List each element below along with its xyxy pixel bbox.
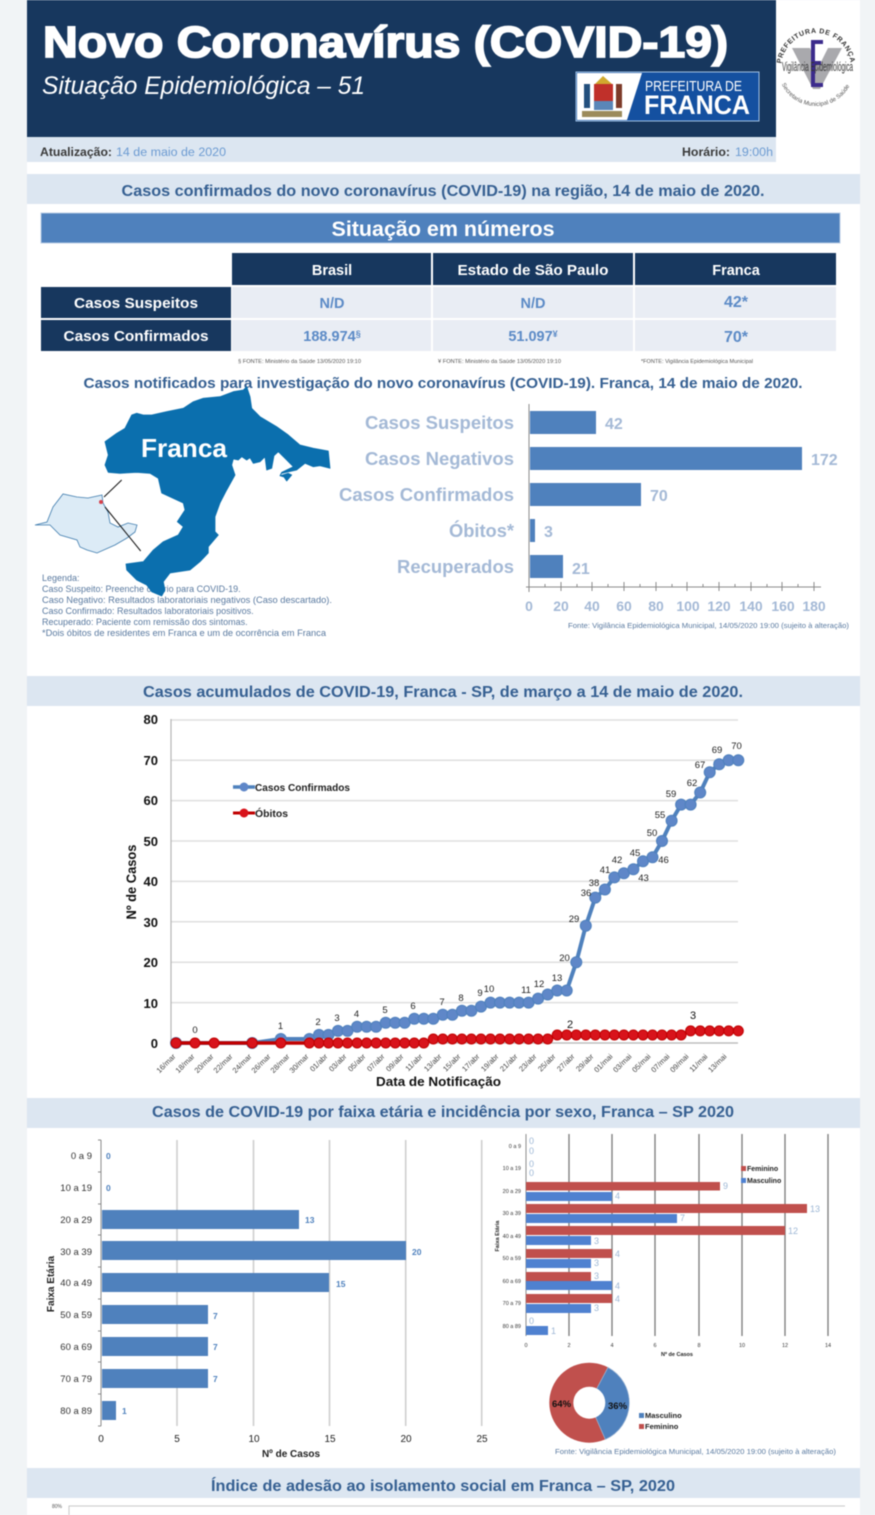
line chart: casos acumulados	[124, 712, 742, 1089]
legend text: Legenda:	[42, 573, 80, 583]
x axis labels: 27/abr	[555, 1052, 577, 1073]
x axis labels: 20	[553, 598, 569, 614]
map: São Paulo state locator	[35, 480, 141, 553]
bar: recuperados	[397, 555, 590, 578]
data labels: 62	[687, 778, 697, 789]
axis labels: 8	[697, 1343, 701, 1349]
table: situação em números: Estado de São Paulo	[458, 263, 609, 279]
axis labels: 0	[524, 1343, 528, 1349]
value labels: 0	[529, 1146, 534, 1156]
data labels: 29	[569, 914, 579, 925]
section heading: casos acumulados: Casos acumulados de COVID-19, Franca - SP, de março a 14 de maio de 2020.	[143, 684, 743, 701]
data labels: 2	[315, 1017, 321, 1028]
y axis labels: 30	[144, 915, 158, 930]
axis labels	[98, 1434, 488, 1445]
x axis labels: 21/abr	[498, 1052, 520, 1073]
bar: negativos: Casos Negativos	[365, 448, 514, 469]
y axis labels: 50	[144, 834, 158, 849]
x axis labels: 23/abr	[517, 1052, 539, 1073]
data labels: 38	[589, 878, 599, 889]
series: óbitos	[176, 1031, 738, 1043]
axis labels: 25	[476, 1434, 488, 1445]
x axis labels: 17/abr	[460, 1052, 482, 1073]
legend text: Recuperado: Paciente com remissão dos sintomas.	[42, 617, 248, 627]
title: Novo Coronavírus (COVID-19)	[43, 18, 728, 67]
value labels: 0	[106, 1151, 111, 1161]
age labels: 20 a 29	[60, 1215, 92, 1226]
age labels: 50 a 59	[60, 1310, 92, 1321]
series: casos confirmados	[176, 760, 738, 1043]
value labels: 12	[788, 1226, 798, 1236]
age labels: 60 a 69	[503, 1279, 521, 1285]
data labels: 59	[666, 789, 676, 800]
logo: Prefeitura de Franca: FRANCA	[644, 90, 750, 120]
axis labels: 0	[98, 1434, 104, 1445]
legend text: Caso Negativo: Resultados laboratoriais negativos (Caso descartado).	[42, 595, 332, 605]
data labels: 11	[521, 985, 531, 996]
value labels: 7	[213, 1342, 218, 1352]
x axis labels: 26/mar	[250, 1052, 273, 1075]
x axis labels: 09/mai	[668, 1052, 691, 1074]
chart: isolamento social (cropped)	[52, 1504, 845, 1515]
table: situação em números	[41, 253, 836, 351]
logo: Prefeitura de Franca	[576, 72, 759, 121]
data labels: 3	[334, 1013, 340, 1024]
data labels: 4	[354, 1009, 359, 1020]
donut chart: sexo: 64%	[552, 1399, 572, 1410]
data labels: 70	[731, 741, 742, 752]
section heading: casos confirmados: Casos confirmados do novo coronavírus (COVID-19) na região, 14 de maio de 2020.	[122, 183, 764, 200]
value labels: 3	[594, 1236, 599, 1246]
age labels: 80 a 89	[503, 1324, 521, 1330]
table footnotes: *FONTE: Vigilância Epidemiológica Municipal	[641, 359, 753, 365]
bar chart: casos notificados	[339, 404, 838, 614]
table: situação em números: 51.097	[508, 329, 553, 345]
bar chart: incidência por sexo: Faixa Etária	[495, 1220, 501, 1251]
bar chart: incidência por sexo	[495, 1134, 831, 1358]
x axis labels: 22/mar	[212, 1052, 235, 1075]
value labels: 0	[529, 1159, 534, 1169]
legend: Feminino	[747, 1166, 778, 1173]
update bar	[27, 137, 776, 162]
age labels: 0 a 9	[71, 1151, 92, 1162]
update bar: 14 de maio de 2020	[116, 147, 226, 159]
legend: Casos Confirmados	[255, 782, 350, 794]
y axis labels: 10	[144, 996, 158, 1011]
legend: Masculino	[747, 1178, 781, 1185]
x axis labels: 13/abr	[422, 1052, 444, 1073]
value labels: 13	[810, 1204, 820, 1214]
axis titles: Nº de Casos	[262, 1449, 320, 1460]
source note: Fonte: Vigilância Epidemiológica Municipal, 14/05/2020 19:00 (sujeito à alteração)	[555, 1447, 837, 1456]
value labels: 1	[122, 1406, 127, 1416]
data labels: 2	[567, 1019, 573, 1031]
data labels: 45	[630, 848, 640, 859]
data labels: 0	[192, 1025, 198, 1036]
value labels: 0	[529, 1316, 534, 1326]
x axis labels: 140	[739, 598, 763, 614]
series: feminino	[526, 1182, 807, 1303]
axis labels	[524, 1343, 831, 1349]
value labels: 4	[615, 1294, 620, 1304]
value labels: 9	[723, 1181, 728, 1191]
x axis labels: 19/abr	[479, 1052, 501, 1073]
bar: óbitos	[449, 519, 553, 542]
x axis labels: 09/abr	[384, 1052, 406, 1073]
data labels: 1	[278, 1021, 283, 1032]
source note: Fonte: Vigilância Epidemiológica Municipal, 14/05/2020 19:00 (sujeito à alteração)	[568, 621, 850, 630]
table: situação em números: Brasil	[312, 263, 352, 279]
heading: situação em números: Situação em números	[332, 218, 554, 241]
data labels	[192, 741, 742, 1036]
table: situação em números: ¥	[553, 329, 558, 339]
legend: Óbitos	[255, 807, 288, 820]
age labels: 30 a 39	[60, 1247, 92, 1258]
axis labels: 14	[825, 1343, 831, 1349]
value labels: 7	[213, 1311, 218, 1321]
x axis labels: 03/abr	[327, 1052, 349, 1073]
age labels: 70 a 79	[60, 1374, 92, 1385]
section heading: faixa etária: Casos de COVID-19 por faixa etária e incidência por sexo, Franca – SP 2020	[152, 1104, 734, 1121]
table: situação em números: Casos Suspeitos	[74, 296, 198, 312]
axis labels: 10	[248, 1434, 260, 1445]
section heading: faixa etária	[27, 1098, 860, 1128]
bar: suspeitos	[365, 411, 623, 434]
table: situação em números: Franca	[712, 263, 761, 279]
data labels: 36	[581, 888, 591, 899]
value labels: 15	[336, 1279, 346, 1289]
data labels: 13	[552, 973, 562, 984]
age labels: 10 a 19	[60, 1183, 92, 1194]
bar: óbitos: 3	[544, 524, 553, 541]
data labels: 41	[600, 865, 610, 876]
table: situação em números: §	[356, 329, 361, 339]
y axis title: Nº de Casos	[124, 844, 139, 920]
x axis labels: 05/abr	[346, 1052, 368, 1073]
x axis title: Data de Notificação	[376, 1074, 501, 1089]
x axis labels: 24/mar	[231, 1052, 254, 1075]
update bar: Horário:	[682, 147, 730, 159]
x axis labels: 120	[707, 598, 731, 614]
x axis labels: 01/abr	[308, 1052, 330, 1073]
axis labels: 20	[400, 1434, 412, 1445]
data labels: 7	[439, 997, 445, 1008]
x axis labels: 60	[616, 598, 632, 614]
x axis labels: 15/abr	[441, 1052, 463, 1073]
bar: óbitos: Óbitos*	[449, 520, 515, 541]
donut chart: sexo: 36%	[608, 1401, 628, 1412]
y axis labels: 20	[144, 955, 158, 970]
x axis labels	[155, 1052, 729, 1075]
legend	[233, 782, 350, 820]
legend text	[42, 573, 332, 638]
x axis labels: 100	[676, 598, 700, 614]
value labels: 7	[680, 1213, 685, 1223]
value labels: 0	[529, 1136, 534, 1146]
x axis labels: 03/mai	[611, 1052, 634, 1074]
section heading: isolamento social: Índice de adesão ao isolamento social em Franca – SP, 2020	[211, 1476, 675, 1495]
subtitle: Situação Epidemiológica – 51	[42, 72, 365, 100]
table: situação em números: 188.974	[303, 329, 356, 345]
value labels: 0	[529, 1168, 534, 1178]
value labels: 7	[213, 1374, 218, 1384]
value labels: 3	[594, 1258, 599, 1268]
axis labels: 5	[174, 1434, 180, 1445]
table: situação em números: N/D	[320, 296, 344, 312]
section heading: casos confirmados	[27, 174, 860, 204]
x axis labels: 25/abr	[536, 1052, 558, 1073]
data labels: 9	[477, 988, 483, 999]
legend text: Caso Confirmado: Resultados laboratoriais positivos.	[42, 606, 254, 616]
logo: Vigilância Epidemiológica: PREFEITURA DE FRANÇA	[776, 28, 856, 64]
logo: Vigilância Epidemiológica	[776, 28, 856, 108]
axis labels: 2	[567, 1343, 571, 1349]
data labels: 67	[695, 760, 705, 771]
donut chart: sexo	[549, 1363, 682, 1443]
x axis labels: 16/mar	[155, 1052, 178, 1075]
bar: negativos	[365, 447, 838, 470]
table footnotes: § FONTE: Ministério da Saúde 13/05/2020 19:10	[238, 359, 361, 365]
x axis labels: 11/abr	[403, 1052, 425, 1073]
x axis labels: 07/mai	[649, 1052, 672, 1074]
data labels: 8	[458, 993, 464, 1004]
legend text: *Dois óbitos de residentes em Franca e um de ocorrência em Franca	[42, 628, 326, 638]
age labels: 10 a 19	[503, 1166, 521, 1172]
bar: negativos: 172	[811, 452, 838, 469]
chart: isolamento social (cropped): 80%	[52, 1504, 63, 1510]
legend	[741, 1166, 781, 1185]
x axis labels: 11/mai	[688, 1052, 710, 1074]
age labels: 70 a 79	[503, 1301, 521, 1307]
x axis labels: 40	[584, 598, 600, 614]
age labels: 80 a 89	[60, 1406, 92, 1417]
section heading: casos acumulados	[27, 676, 860, 706]
legend: Feminino	[645, 1422, 679, 1431]
bar: confirmados	[339, 483, 668, 506]
age labels	[60, 1151, 92, 1417]
x axis labels: 0	[525, 598, 533, 614]
series: masculino	[526, 1192, 677, 1335]
value labels: 0	[106, 1183, 111, 1193]
y axis labels: 70	[144, 753, 158, 768]
value labels: 4	[615, 1191, 620, 1201]
legend	[639, 1411, 682, 1431]
data labels: 5	[382, 1005, 388, 1016]
bar: suspeitos: Casos Suspeitos	[365, 412, 514, 433]
x axis labels	[525, 598, 826, 614]
value labels: 20	[412, 1247, 422, 1257]
x axis labels: 30/mar	[288, 1052, 311, 1075]
bar chart: casos por faixa etária	[46, 1140, 488, 1460]
section heading: casos notificados: Casos notificados para investigação do novo coronavírus (COVID-19). Franca, 14 de maio de 2020.	[84, 375, 802, 392]
age labels: 30 a 39	[503, 1211, 521, 1217]
logo: Prefeitura de Franca: PREFEITURA DE	[645, 79, 742, 95]
bar chart: casos por faixa etária: Faixa Etária	[46, 1255, 57, 1312]
value labels: 1	[551, 1326, 556, 1336]
table: situação em números: 42*	[724, 294, 749, 311]
y axis labels: 60	[144, 793, 158, 808]
logo: Vigilância Epidemiológica: Secretaria Municipal de Saúde	[782, 82, 850, 108]
value labels: 4	[615, 1249, 620, 1259]
value labels: 4	[615, 1281, 620, 1291]
table: situação em números: 70*	[724, 329, 749, 346]
bar: confirmados: 70	[650, 488, 668, 505]
heading: situação em números	[41, 213, 840, 243]
value labels	[529, 1136, 820, 1336]
y axis labels: 0	[151, 1036, 158, 1051]
data labels: 3	[690, 1010, 696, 1022]
data labels: 50	[647, 828, 657, 839]
header banner	[27, 0, 776, 137]
age labels: 0 a 9	[509, 1144, 521, 1150]
bar: suspeitos: 42	[605, 416, 623, 433]
legend: Masculino	[645, 1411, 682, 1420]
x axis labels: 29/abr	[574, 1052, 596, 1073]
axis labels: 4	[610, 1343, 614, 1349]
value labels: 3	[594, 1303, 599, 1313]
data labels: 20	[559, 953, 570, 964]
data labels: 55	[655, 810, 665, 821]
label: Franca: Franca	[141, 433, 228, 463]
x axis labels: 05/mai	[630, 1052, 653, 1074]
x axis labels: 18/mar	[174, 1052, 197, 1075]
data labels: 10	[484, 984, 494, 995]
bar: recuperados: Recuperados	[397, 556, 514, 577]
value labels: 3	[594, 1271, 599, 1281]
axis labels: 12	[782, 1343, 788, 1349]
table footnotes	[238, 359, 753, 365]
data labels: 6	[410, 1001, 416, 1012]
legend text: Caso Suspeito: Preenche critério para COVID-19.	[42, 584, 241, 594]
axis labels: 6	[653, 1343, 657, 1349]
data labels: 42	[612, 855, 622, 866]
age labels: 40 a 49	[60, 1278, 92, 1289]
value labels: 13	[305, 1215, 315, 1225]
update bar: 19:00h	[735, 147, 773, 159]
age labels: 60 a 69	[60, 1342, 92, 1353]
update bar: Atualização:	[40, 147, 112, 159]
age labels: 50 a 59	[503, 1256, 521, 1262]
bar: recuperados: 21	[572, 561, 590, 578]
value labels	[106, 1151, 422, 1416]
age labels	[503, 1144, 521, 1330]
age labels: 20 a 29	[503, 1189, 521, 1195]
age labels: 40 a 49	[503, 1234, 521, 1240]
map: Franca municipality	[105, 387, 330, 596]
axis labels: 15	[324, 1434, 336, 1445]
y axis labels: 80	[144, 712, 158, 727]
axis labels: 10	[739, 1343, 745, 1349]
data labels: 46	[658, 855, 669, 866]
y axis labels: 40	[144, 874, 158, 889]
x axis labels: 20/mar	[193, 1052, 216, 1075]
table: situação em números: Casos Confirmados	[64, 329, 208, 345]
bar: confirmados: Casos Confirmados	[339, 484, 514, 505]
y axis labels	[144, 712, 158, 1051]
x axis labels: 07/abr	[365, 1052, 387, 1073]
table: situação em números: N/D	[521, 296, 545, 312]
x axis labels: 180	[802, 598, 826, 614]
x axis labels: 160	[771, 598, 795, 614]
data labels: 69	[712, 745, 722, 756]
x axis labels: 80	[648, 598, 664, 614]
section heading: isolamento social	[27, 1468, 860, 1498]
table footnotes: ¥ FONTE: Ministério da Saúde 13/05/2020 19:10	[438, 359, 561, 365]
x axis labels: 01/mai	[592, 1052, 615, 1074]
data labels: 43	[638, 873, 649, 884]
axis titles: Nº de Casos	[661, 1352, 693, 1358]
x axis labels: 28/mar	[269, 1052, 292, 1075]
x axis labels: 13/mai	[706, 1052, 729, 1074]
data labels: 12	[534, 979, 544, 990]
